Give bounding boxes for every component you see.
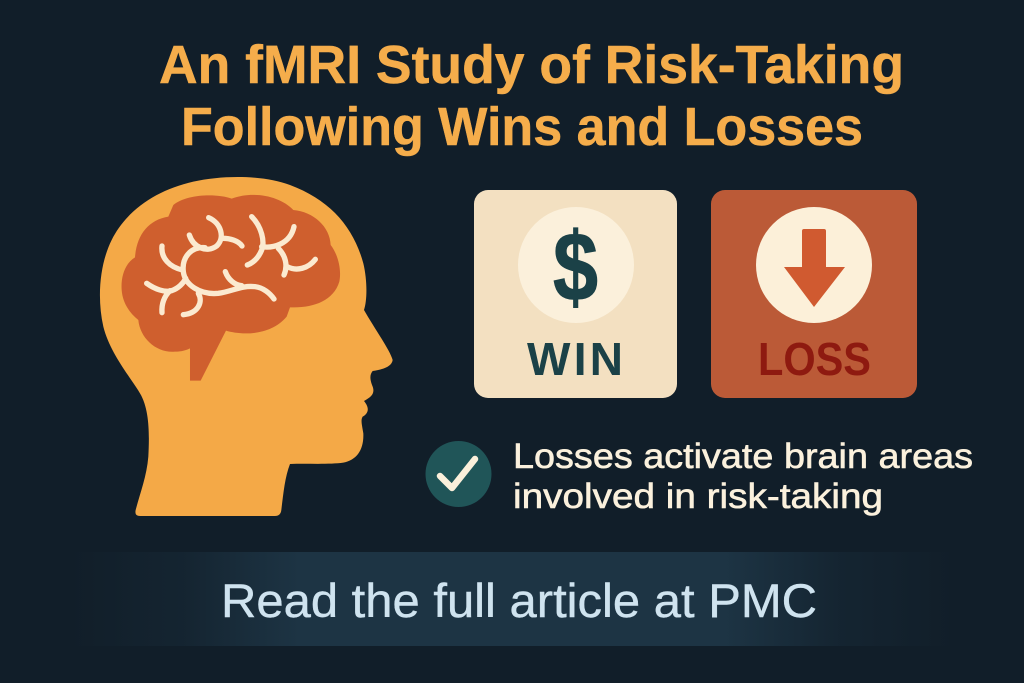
loss label: LOSS <box>758 333 871 385</box>
text block: key finding <box>513 437 973 516</box>
win label: WIN <box>527 333 623 385</box>
panel: loss card <box>711 190 917 398</box>
icon: dollar coin <box>518 207 634 323</box>
footer banner <box>70 552 954 646</box>
brain folds <box>147 217 315 315</box>
head silhouette <box>100 177 393 516</box>
brain <box>122 195 340 381</box>
icon: check mark <box>426 441 492 507</box>
icon: dollar coin: $ <box>553 212 598 322</box>
icon: down arrow <box>756 207 872 323</box>
title: An fMRI Study of Risk-Taking <box>159 35 904 95</box>
text block: key finding: involved in risk-taking <box>513 477 883 516</box>
icon: head profile with brain <box>100 177 393 516</box>
title: Following Wins and Losses <box>181 97 863 157</box>
title <box>159 35 904 157</box>
footer text: Read the full article at PMC <box>221 574 817 627</box>
text block: key finding: Losses activate brain areas <box>513 437 973 476</box>
panel: win card <box>474 190 677 398</box>
